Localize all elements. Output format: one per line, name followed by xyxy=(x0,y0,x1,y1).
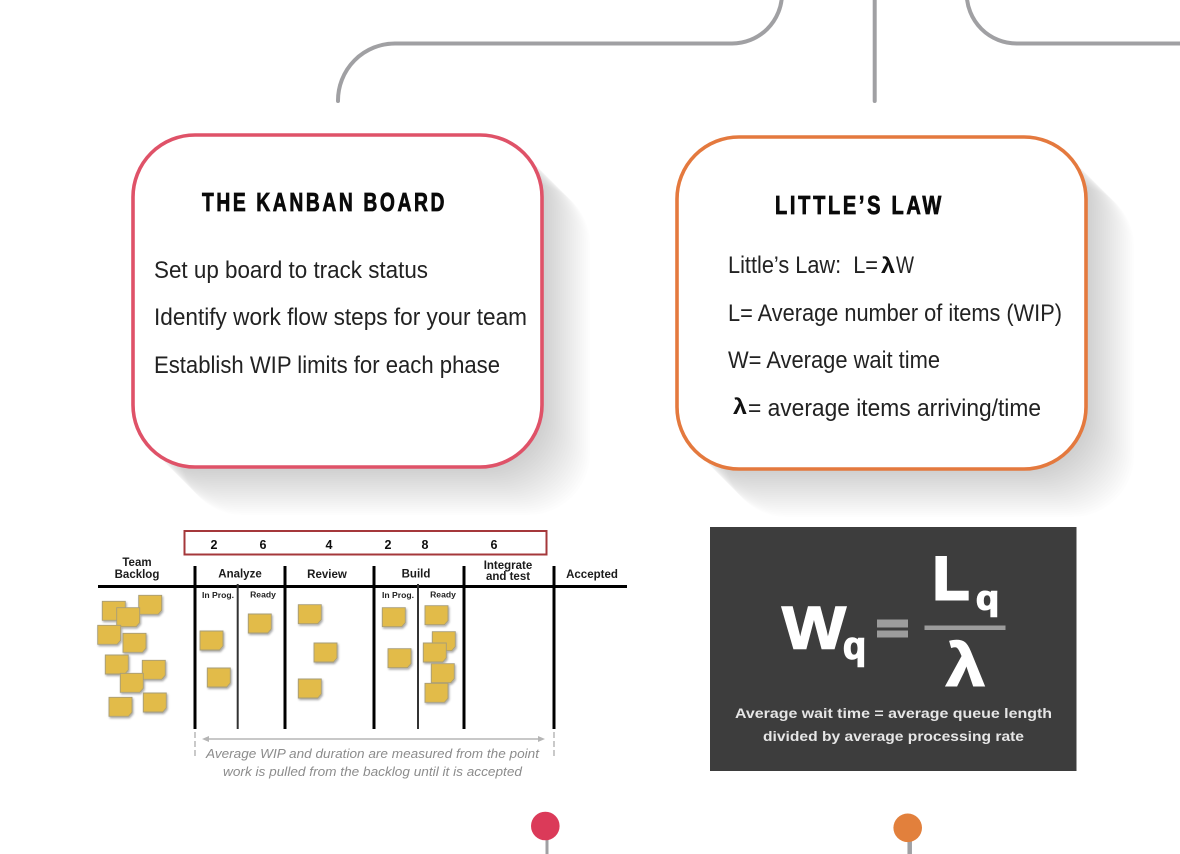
chart: Kanban board diagram xyxy=(98,531,627,779)
column headings: Accepted xyxy=(566,569,618,581)
formula: L xyxy=(933,545,969,612)
column headings: Integrate xyxy=(484,560,532,572)
WIP limits box xyxy=(184,531,546,554)
formula: q xyxy=(843,626,866,668)
formula: W xyxy=(782,594,846,662)
text block: Little's Law definitions: λ xyxy=(881,253,895,278)
formula xyxy=(782,545,1006,699)
column headings xyxy=(115,557,618,600)
text block: Kanban steps: Identify work flow steps for your team xyxy=(154,304,527,331)
column headings: Build xyxy=(402,568,430,580)
arrow: measured span xyxy=(195,732,554,757)
formula caption: divided by average processing rate xyxy=(763,728,1024,744)
heading: the Kanban board: THE KANBAN BOARD xyxy=(202,187,447,217)
WIP limits box: 8 xyxy=(422,538,429,552)
WIP limits box: 2 xyxy=(211,538,218,552)
formula caption xyxy=(735,705,1052,744)
pin: orange xyxy=(893,814,922,854)
column headings: Backlog xyxy=(115,569,159,581)
text block: board note: work is pulled from the backlog until it is accepted xyxy=(223,765,523,779)
WIP limits box: 6 xyxy=(260,538,267,552)
column headings: Ready xyxy=(430,590,456,600)
WIP limits box: 6 xyxy=(491,538,498,552)
text block: Kanban steps: Establish WIP limits for each phase xyxy=(154,352,500,379)
panel: Little's Law card xyxy=(677,137,1134,517)
heading: Little's Law: LITTLE’S LAW xyxy=(775,190,944,220)
column headings: In Prog. xyxy=(382,590,414,600)
formula: q xyxy=(976,580,999,618)
formula caption: Average wait time = average queue length xyxy=(735,705,1052,721)
column headings: and test xyxy=(486,571,530,583)
text block: Little's Law definitions: = average items arriving/time xyxy=(748,395,1041,422)
text block: Little's Law definitions: L= Average number of items (WIP) xyxy=(728,300,1062,327)
text block: board note xyxy=(205,747,540,779)
column headings: Team xyxy=(122,557,152,569)
text block: Little's Law definitions: W= Average wait time xyxy=(728,347,940,374)
text block: Kanban steps: Set up board to track status xyxy=(154,257,428,284)
text block: Little's Law definitions: W xyxy=(896,252,914,279)
column headings: Review xyxy=(307,569,347,581)
text block: Little's Law definitions: Little’s Law: L= xyxy=(728,252,878,279)
text block: Kanban steps xyxy=(154,257,527,379)
text block: board note: Average WIP and duration are measured from the point xyxy=(205,747,540,761)
column headings: Analyze xyxy=(218,568,262,580)
column headings: Ready xyxy=(250,590,276,600)
text block: Little's Law definitions xyxy=(728,252,1062,422)
text block: Little's Law definitions: λ xyxy=(733,394,747,419)
WIP limits box: 2 xyxy=(385,538,392,552)
WIP limits box: 4 xyxy=(326,538,333,552)
connector: branch to Little's Law card xyxy=(873,0,877,101)
panel: wait time formula xyxy=(710,527,1076,771)
board grid lines xyxy=(98,566,627,729)
connector: branch to the right xyxy=(967,0,1180,44)
column headings: In Prog. xyxy=(202,590,234,600)
pin: red xyxy=(531,812,560,854)
formula: λ xyxy=(946,632,985,699)
connector: branch to Kanban card xyxy=(338,0,782,101)
sticky notes xyxy=(98,595,455,716)
panel: the Kanban board card xyxy=(133,135,590,515)
